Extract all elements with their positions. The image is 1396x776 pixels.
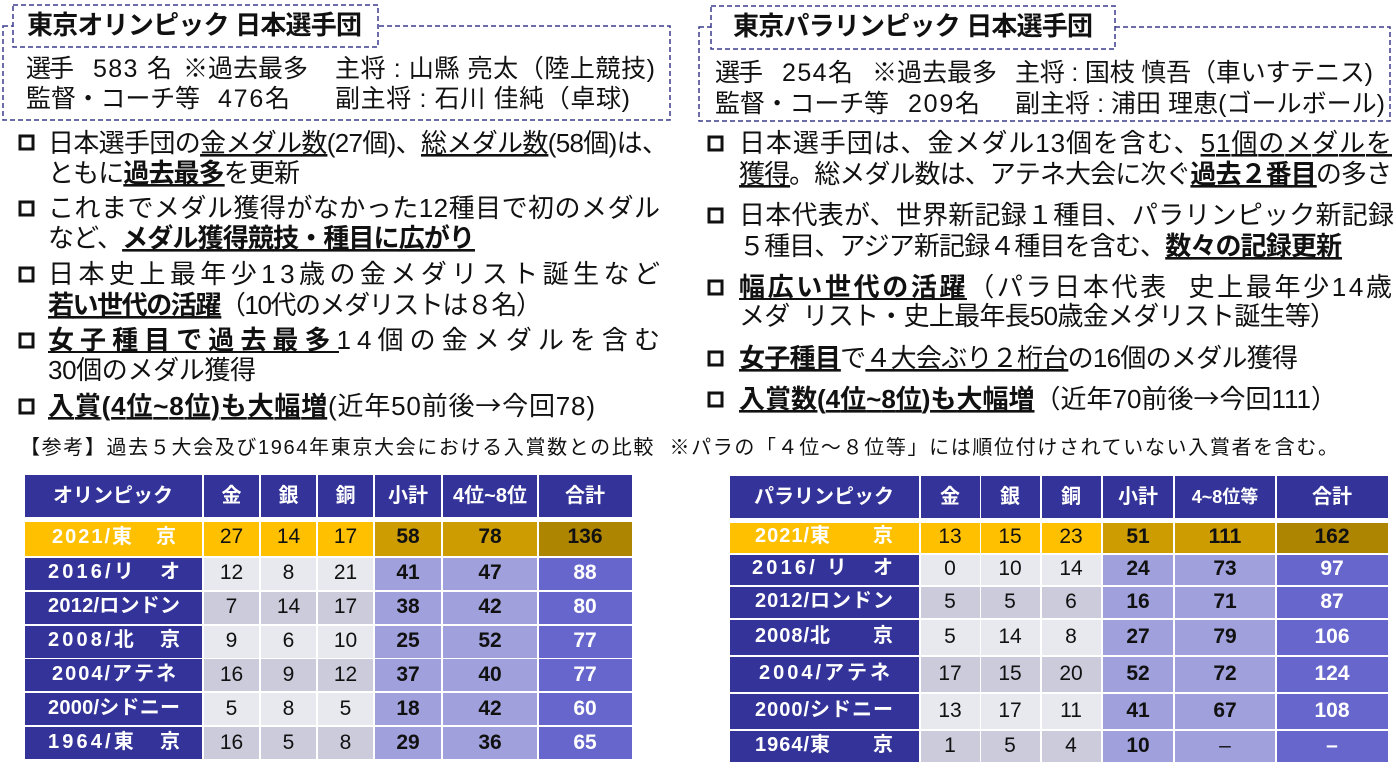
row: 2021 Tokyo: 111 <box>1209 525 1242 548</box>
row: 2016 Rio: 21 <box>334 561 357 584</box>
row: 2004 Athens <box>25 659 632 691</box>
table header row: 小計 <box>1118 485 1158 508</box>
row: 2004 Athens: 37 <box>396 663 420 686</box>
row: 2021 Tokyo: 51 <box>1126 525 1150 548</box>
row: 2004 Athens: 72 <box>1213 662 1237 685</box>
row: 2000 Sydney: 18 <box>396 697 420 720</box>
row: 2012 London: 16 <box>1126 590 1150 613</box>
row: 1964 Tokyo: 1 <box>944 734 956 757</box>
row: 2021 Tokyo: 162 <box>1314 525 1350 548</box>
row: 2016 Rio <box>25 558 632 590</box>
table header row: オリンピック <box>53 484 173 507</box>
table header row: 合計 <box>565 484 605 507</box>
bullet list: Olympic highlights <box>20 128 668 423</box>
heading: Paralympic team <box>711 6 1115 49</box>
row: 2012 London: 71 <box>1213 590 1237 613</box>
row: 2008 Beijing: 77 <box>573 629 597 652</box>
row: 2016 Rio: 2016/リ オ <box>48 561 180 583</box>
row: 2012 London: 2012/ロンドン <box>48 595 180 617</box>
row: 2004 Athens: 40 <box>478 663 502 686</box>
row: 2021 Tokyo: 58 <box>396 525 420 548</box>
bullet list: Olympic highlights: など、メダル獲得競技・種目に広がり <box>48 223 475 253</box>
panel: Paralympic team summary <box>699 6 1390 121</box>
row: 2000 Sydney: 42 <box>478 697 502 720</box>
bullet list: Olympic highlights: これまでメダル獲得がなかった12種目で初のメダル <box>48 193 660 223</box>
bullet list: Olympic highlights: ともに過去最多を更新 <box>48 158 300 188</box>
text: Olympic team numbers and captains: 選手 <box>26 55 74 83</box>
row: 2004 Athens: 15 <box>998 662 1022 685</box>
row: 2000 Sydney <box>25 693 632 725</box>
row: 2016 Rio: 10 <box>998 557 1022 580</box>
bullet list: Paralympic highlights: 入賞数(4位~8位)も大幅増（近年70前後→今回111） <box>739 379 1337 416</box>
bullet list: Olympic highlights: 日本選手団の金メダル数(27個)、総メダル数(58個)は、 <box>48 128 668 158</box>
row: 2016 Rio: 97 <box>1320 557 1344 580</box>
row: 2008 Beijing: 2008/北 京 <box>755 624 893 647</box>
row: 2000 Sydney: 13 <box>938 699 962 722</box>
row: 2004 Athens: 77 <box>573 663 597 686</box>
row: 2012 London: 2012/ロンドン <box>755 590 893 612</box>
table header row: 金 <box>940 485 960 508</box>
bullet list: Olympic highlights: 30個のメダル獲得 <box>48 355 256 385</box>
text: Olympic team numbers and captains: 583 名 <box>93 55 172 83</box>
row: 2008 Beijing: 10 <box>334 629 357 652</box>
row: 2012 London: 80 <box>573 595 597 618</box>
table header row: 金 <box>222 484 242 507</box>
row: 2008 Beijing: 6 <box>283 629 294 652</box>
text: Olympic team numbers and captains: ※過去最多 <box>183 55 308 83</box>
row: 2000 Sydney: 108 <box>1314 699 1350 722</box>
row: 1964 Tokyo: 1964/東 京 <box>755 733 893 756</box>
table header row: 銀 <box>278 484 298 507</box>
row: 2008 Beijing <box>25 626 632 658</box>
table header row: 銀 <box>1000 485 1020 508</box>
text: Olympic team numbers and captains <box>26 55 655 113</box>
row: 2021 Tokyo: 2021/東 京 <box>755 524 893 547</box>
bullet list: Olympic highlights: 女子種目で過去最多14個の金メダルを含む <box>48 325 660 355</box>
row: 2021 Tokyo: 13 <box>938 525 962 548</box>
bullet list: Olympic highlights: 日本史上最年少13歳の金メダリスト誕生など <box>48 259 660 289</box>
row: 2008 Beijing <box>730 620 1388 655</box>
row: 2012 London: 5 <box>1004 590 1016 613</box>
row: 2021 Tokyo: 2021/東 京 <box>52 525 176 548</box>
text: Paralympic team numbers and captains: ※過去最多 <box>872 59 997 87</box>
row: 1964 Tokyo: – <box>1219 734 1231 757</box>
row: 2000 Sydney: 2000/シドニー <box>48 697 180 719</box>
row: 2016 Rio <box>730 555 1388 585</box>
row: 2000 Sydney: 5 <box>226 697 237 720</box>
row: 2012 London: 7 <box>226 595 237 618</box>
row: 1964 Tokyo <box>25 727 632 759</box>
table header row: 合計 <box>1312 485 1352 508</box>
bullet list: Paralympic highlights: 日本選手団は、金メダル13個を含む、51個のメダルを <box>739 128 1392 158</box>
row: 1964 Tokyo <box>730 731 1388 762</box>
table header row: 小計 <box>388 484 428 507</box>
row: 2000 Sydney: 5 <box>340 697 351 720</box>
row: 2008 Beijing: 79 <box>1213 625 1237 648</box>
text: Paralympic team numbers and captains: 監督・コーチ等 <box>715 90 889 118</box>
row: 2021 Tokyo: 27 <box>220 525 243 548</box>
row: 1964 Tokyo: 10 <box>1126 734 1150 757</box>
text: Paralympic team numbers and captains: 選手 <box>715 59 763 87</box>
row: 2004 Athens: 17 <box>938 662 962 685</box>
row: 2000 Sydney: 8 <box>283 697 294 720</box>
row: 2000 Sydney: 67 <box>1213 699 1237 722</box>
row: 2000 Sydney: 60 <box>573 697 597 720</box>
row: 1964 Tokyo: 16 <box>220 731 243 754</box>
row: 2008 Beijing: 52 <box>478 629 502 652</box>
row: 2004 Athens: 2004/アテネ <box>759 661 890 684</box>
bullet list: Paralympic highlights: 日本代表が、世界新記録１種目、パラリンピック新記録 <box>739 200 1394 230</box>
heading: Olympic team: 東京オリンピック 日本選手団 <box>27 10 362 40</box>
note: comparison reference: 【参考】過去５大会及び1964年東京大会における入賞数との比較 ※パラの「４位～８位等」には順位付けされていない入賞者を含む。 <box>20 436 1338 459</box>
text: Paralympic team numbers and captains <box>715 59 1385 118</box>
row: 2012 London: 5 <box>944 590 956 613</box>
row: 2016 Rio: 41 <box>396 561 420 584</box>
row: 2000 Sydney: 17 <box>998 699 1022 722</box>
text: Olympic team numbers and captains: 476名 <box>218 85 290 113</box>
table header row: 4位~8位 <box>453 484 527 507</box>
row: 2004 Athens: 9 <box>283 663 294 686</box>
row: 2008 Beijing: 2008/北 京 <box>48 628 180 651</box>
row: 1964 Tokyo: 29 <box>396 731 420 754</box>
table: Paralympic medal comparison <box>730 476 1388 762</box>
row: 2000 Sydney <box>730 694 1388 729</box>
row: 2008 Beijing: 5 <box>944 625 956 648</box>
text: Paralympic team numbers and captains: 主将 : 国枝 慎吾（車いすテニス) <box>1015 59 1373 87</box>
row: 2004 Athens: 2004/アテネ <box>52 662 176 685</box>
row: 1964 Tokyo: – <box>1326 734 1338 757</box>
row: 2000 Sydney: 2000/シドニー <box>755 699 893 721</box>
row: 2008 Beijing: 25 <box>396 629 420 652</box>
row: 1964 Tokyo: 36 <box>478 731 502 754</box>
row: 2012 London: 38 <box>396 595 420 618</box>
row: 2004 Athens: 16 <box>220 663 243 686</box>
bullet list: Olympic highlights: 入賞(4位~8位)も大幅増(近年50前後→今回78) <box>48 386 595 423</box>
table header row: パラリンピック <box>754 485 894 508</box>
row: 2012 London: 14 <box>277 595 300 618</box>
row: 2008 Beijing: 27 <box>1126 625 1150 648</box>
row: 2021 Tokyo: 14 <box>277 525 300 548</box>
row: 2008 Beijing: 8 <box>1065 625 1077 648</box>
row: 2016 Rio: 47 <box>478 561 502 584</box>
row: 2008 Beijing: 9 <box>226 629 237 652</box>
row: 2004 Athens: 12 <box>334 663 357 686</box>
row: 1964 Tokyo: 5 <box>283 731 294 754</box>
row: 2008 Beijing: 14 <box>998 625 1022 648</box>
row: 2016 Rio: 88 <box>573 561 597 584</box>
panel: Olympic team summary <box>3 5 670 120</box>
row: 2021 Tokyo <box>25 522 632 556</box>
row: 2021 Tokyo: 136 <box>567 525 603 548</box>
row: 2021 Tokyo: 17 <box>334 525 357 548</box>
bullet list: Paralympic highlights: 幅広い世代の活躍（パラ日本代表 史上最年少14歳 <box>739 272 1392 302</box>
row: 2016 Rio: 2016/ リ オ <box>752 557 893 579</box>
table header row: 銅 <box>1061 485 1081 508</box>
row: 2000 Sydney: 41 <box>1126 699 1150 722</box>
row: 2021 Tokyo: 15 <box>998 525 1022 548</box>
row: 2004 Athens: 124 <box>1314 662 1350 685</box>
row: 2012 London: 87 <box>1320 590 1344 613</box>
heading: Paralympic team: 東京パラリンピック 日本選手団 <box>733 11 1093 41</box>
row: 2008 Beijing: 106 <box>1314 625 1350 648</box>
row: 2012 London <box>730 587 1388 618</box>
row: 2021 Tokyo: 78 <box>478 525 502 548</box>
row: 2016 Rio: 24 <box>1126 557 1150 580</box>
row: 2016 Rio: 12 <box>220 561 243 584</box>
table: Olympic medal comparison <box>25 475 632 759</box>
text: Olympic team numbers and captains: 主将 : 山縣 亮太（陸上競技) <box>335 55 655 83</box>
bullet list: Paralympic highlights <box>709 128 1394 416</box>
table header row <box>25 475 632 517</box>
row: 2021 Tokyo: 23 <box>1059 525 1083 548</box>
row: 1964 Tokyo: 5 <box>1004 734 1016 757</box>
row: 1964 Tokyo: 8 <box>340 731 351 754</box>
text: Paralympic team numbers and captains: 209名 <box>908 90 980 118</box>
text: Paralympic team numbers and captains: 副主将 : 浦田 理恵(ゴールボール) <box>1015 90 1385 118</box>
row: 2012 London: 42 <box>478 595 502 618</box>
row: 2016 Rio: 8 <box>283 561 294 584</box>
row: 2012 London: 17 <box>334 595 357 618</box>
table header row: 4~8位等 <box>1192 486 1258 507</box>
row: 1964 Tokyo: 1964/東 京 <box>48 730 180 753</box>
row: 2000 Sydney: 11 <box>1060 699 1082 722</box>
row: 2012 London: 6 <box>1065 590 1077 613</box>
table header row <box>730 476 1388 518</box>
row: 2016 Rio: 14 <box>1059 557 1083 580</box>
text: Olympic team numbers and captains: 副主将 : 石川 佳純（卓球) <box>335 85 630 113</box>
heading: Olympic team <box>13 5 378 47</box>
row: 1964 Tokyo: 4 <box>1065 734 1077 757</box>
bullet list: Paralympic highlights: ５種目、アジア新記録４種目を含む、数々の記録更新 <box>739 231 1342 261</box>
bullet list: Olympic highlights: 若い世代の活躍（10代のメダリストは８名） <box>48 290 542 320</box>
bullet list: Paralympic highlights: 獲得。総メダル数は、アテネ大会に次ぐ過去２番目の多さ <box>739 159 1392 189</box>
bullet list: Paralympic highlights: 女子種目で４大会ぶり２桁台の16個のメダル獲得 <box>739 343 1298 373</box>
text: Paralympic team numbers and captains: 254名 <box>782 59 853 87</box>
bullet list: Paralympic highlights: メダ リスト・史上最年長50歳金メダリスト誕生等） <box>739 301 1336 331</box>
row: 2021 Tokyo <box>730 523 1388 553</box>
row: 2016 Rio: 0 <box>944 557 956 580</box>
table header row: 銅 <box>336 484 356 507</box>
row: 2012 London <box>25 592 632 624</box>
row: 2004 Athens <box>730 657 1388 692</box>
row: 2004 Athens: 52 <box>1126 662 1150 685</box>
row: 2004 Athens: 20 <box>1059 662 1083 685</box>
row: 1964 Tokyo: 65 <box>573 731 597 754</box>
text: Olympic team numbers and captains: 監督・コーチ等 <box>26 85 200 113</box>
row: 2016 Rio: 73 <box>1213 557 1237 580</box>
